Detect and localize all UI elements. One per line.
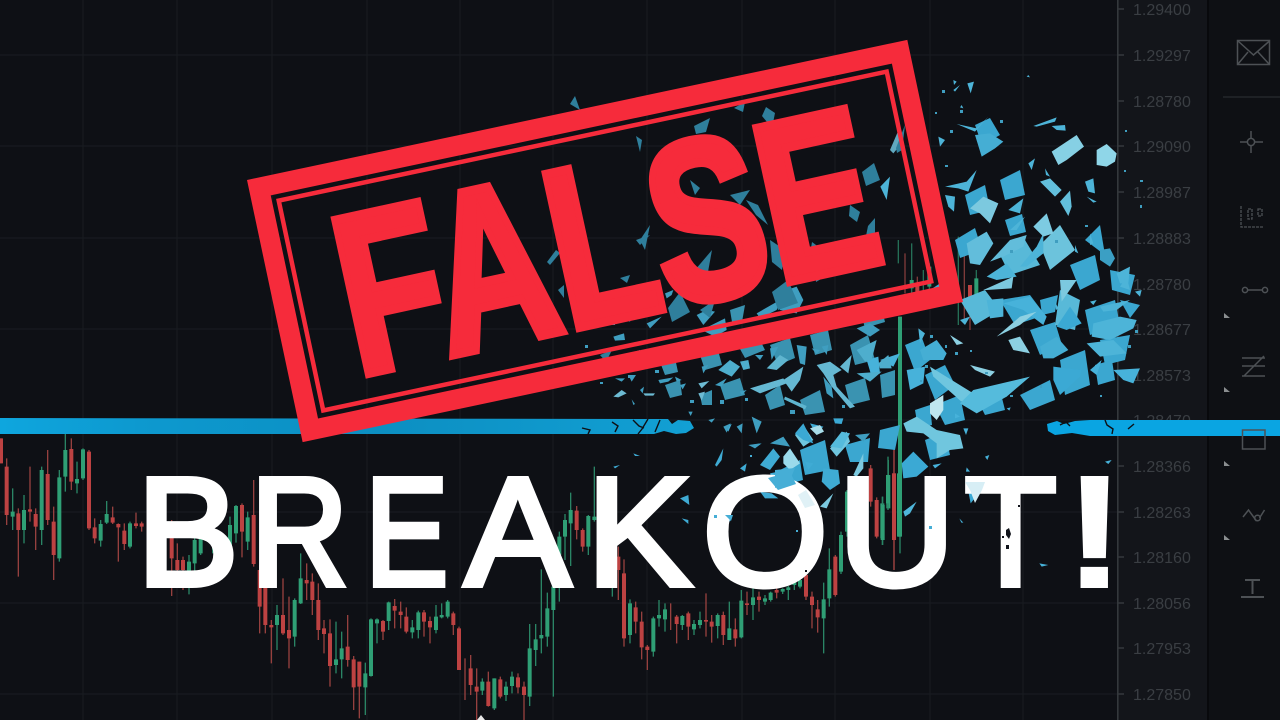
main word: BREAKOUT!: ! (1066, 446, 1123, 618)
fragments: beside breakout letters (613, 423, 863, 524)
toolbar divider (1223, 96, 1280, 98)
icon: trend line (1242, 287, 1268, 293)
main word: BREAKOUT!: R (251, 446, 348, 618)
price axis labels: 1.28160 (1133, 550, 1191, 567)
fragments: behind the stamp (547, 96, 905, 362)
price axis labels: 1.28573 (1133, 368, 1191, 385)
price axis labels: 1.28883 (1133, 231, 1191, 248)
main word: BREAKOUT!: K (587, 446, 691, 618)
price axis labels: 1.28987 (1133, 185, 1191, 202)
fragments: extra fill of the dim cloud (625, 302, 895, 415)
icon: text tool (1241, 580, 1264, 597)
price axis labels: 1.29297 (1133, 48, 1191, 65)
candles: middle section (453, 443, 899, 720)
shattered glass fragments (547, 75, 1143, 567)
FALSE rubber stamp (247, 40, 963, 442)
support line left segment (0, 418, 694, 434)
icon: parallel lines (1242, 356, 1265, 376)
main word: BREAKOUT!: U (838, 446, 955, 618)
icon: envelope (1238, 40, 1270, 64)
price axis labels: 1.28470 (1133, 413, 1191, 430)
price axis labels: 1.29090 (1133, 139, 1191, 156)
icon: rectangle (1242, 430, 1265, 449)
price axis labels: 1.28677 (1133, 322, 1191, 339)
price axis panel (1117, 0, 1280, 720)
line cracks (582, 419, 1134, 434)
price axis labels: 1.28056 (1133, 596, 1191, 613)
main word: BREAKOUT!: A (465, 446, 571, 618)
main word: BREAKOUT!: E (365, 446, 448, 618)
toolbar flyout markers (1224, 313, 1230, 540)
price axis labels: 1.28263 (1133, 505, 1191, 522)
fragments: upper right cluster (880, 75, 1142, 360)
support line right segment (1047, 420, 1280, 436)
icon: wave (1243, 510, 1264, 521)
price axis labels: 1.28366 (1133, 459, 1191, 476)
main word: BREAKOUT!: O (702, 446, 828, 618)
price axis labels: 1.28780 (1133, 277, 1191, 294)
icon: crosshair (1240, 131, 1263, 153)
fragments: beneath the stamp (613, 287, 892, 448)
fragments: lower right cluster (867, 353, 1140, 567)
drawing toolbar (1223, 40, 1280, 597)
fine glass debris (585, 80, 1143, 414)
price axis labels: 1.28780 (1133, 94, 1191, 111)
fragments overlapping letters (714, 455, 1020, 572)
price axis labels (1117, 2, 1191, 704)
price axis labels: 1.29400 (1133, 2, 1191, 19)
stamp word: FALSE: FALSE (313, 58, 899, 424)
price axis labels: 1.27850 (1133, 687, 1191, 704)
fragments: extra fill of the main cloud (780, 118, 1140, 485)
main word: BREAKOUT!: T (965, 446, 1057, 618)
stamp inner frame (276, 69, 934, 413)
chart cursor tip (477, 715, 485, 720)
main word: BREAKOUT!: B (137, 446, 239, 618)
candles: left section (1, 433, 448, 718)
candlestick chart (1, 237, 976, 720)
price axis labels: 1.27953 (1133, 641, 1191, 658)
candles: upper wicks behind the stamp (898, 237, 976, 330)
candles: breakout section (883, 317, 900, 570)
stamp outer frame (247, 40, 963, 442)
icon: candles (1241, 206, 1264, 227)
